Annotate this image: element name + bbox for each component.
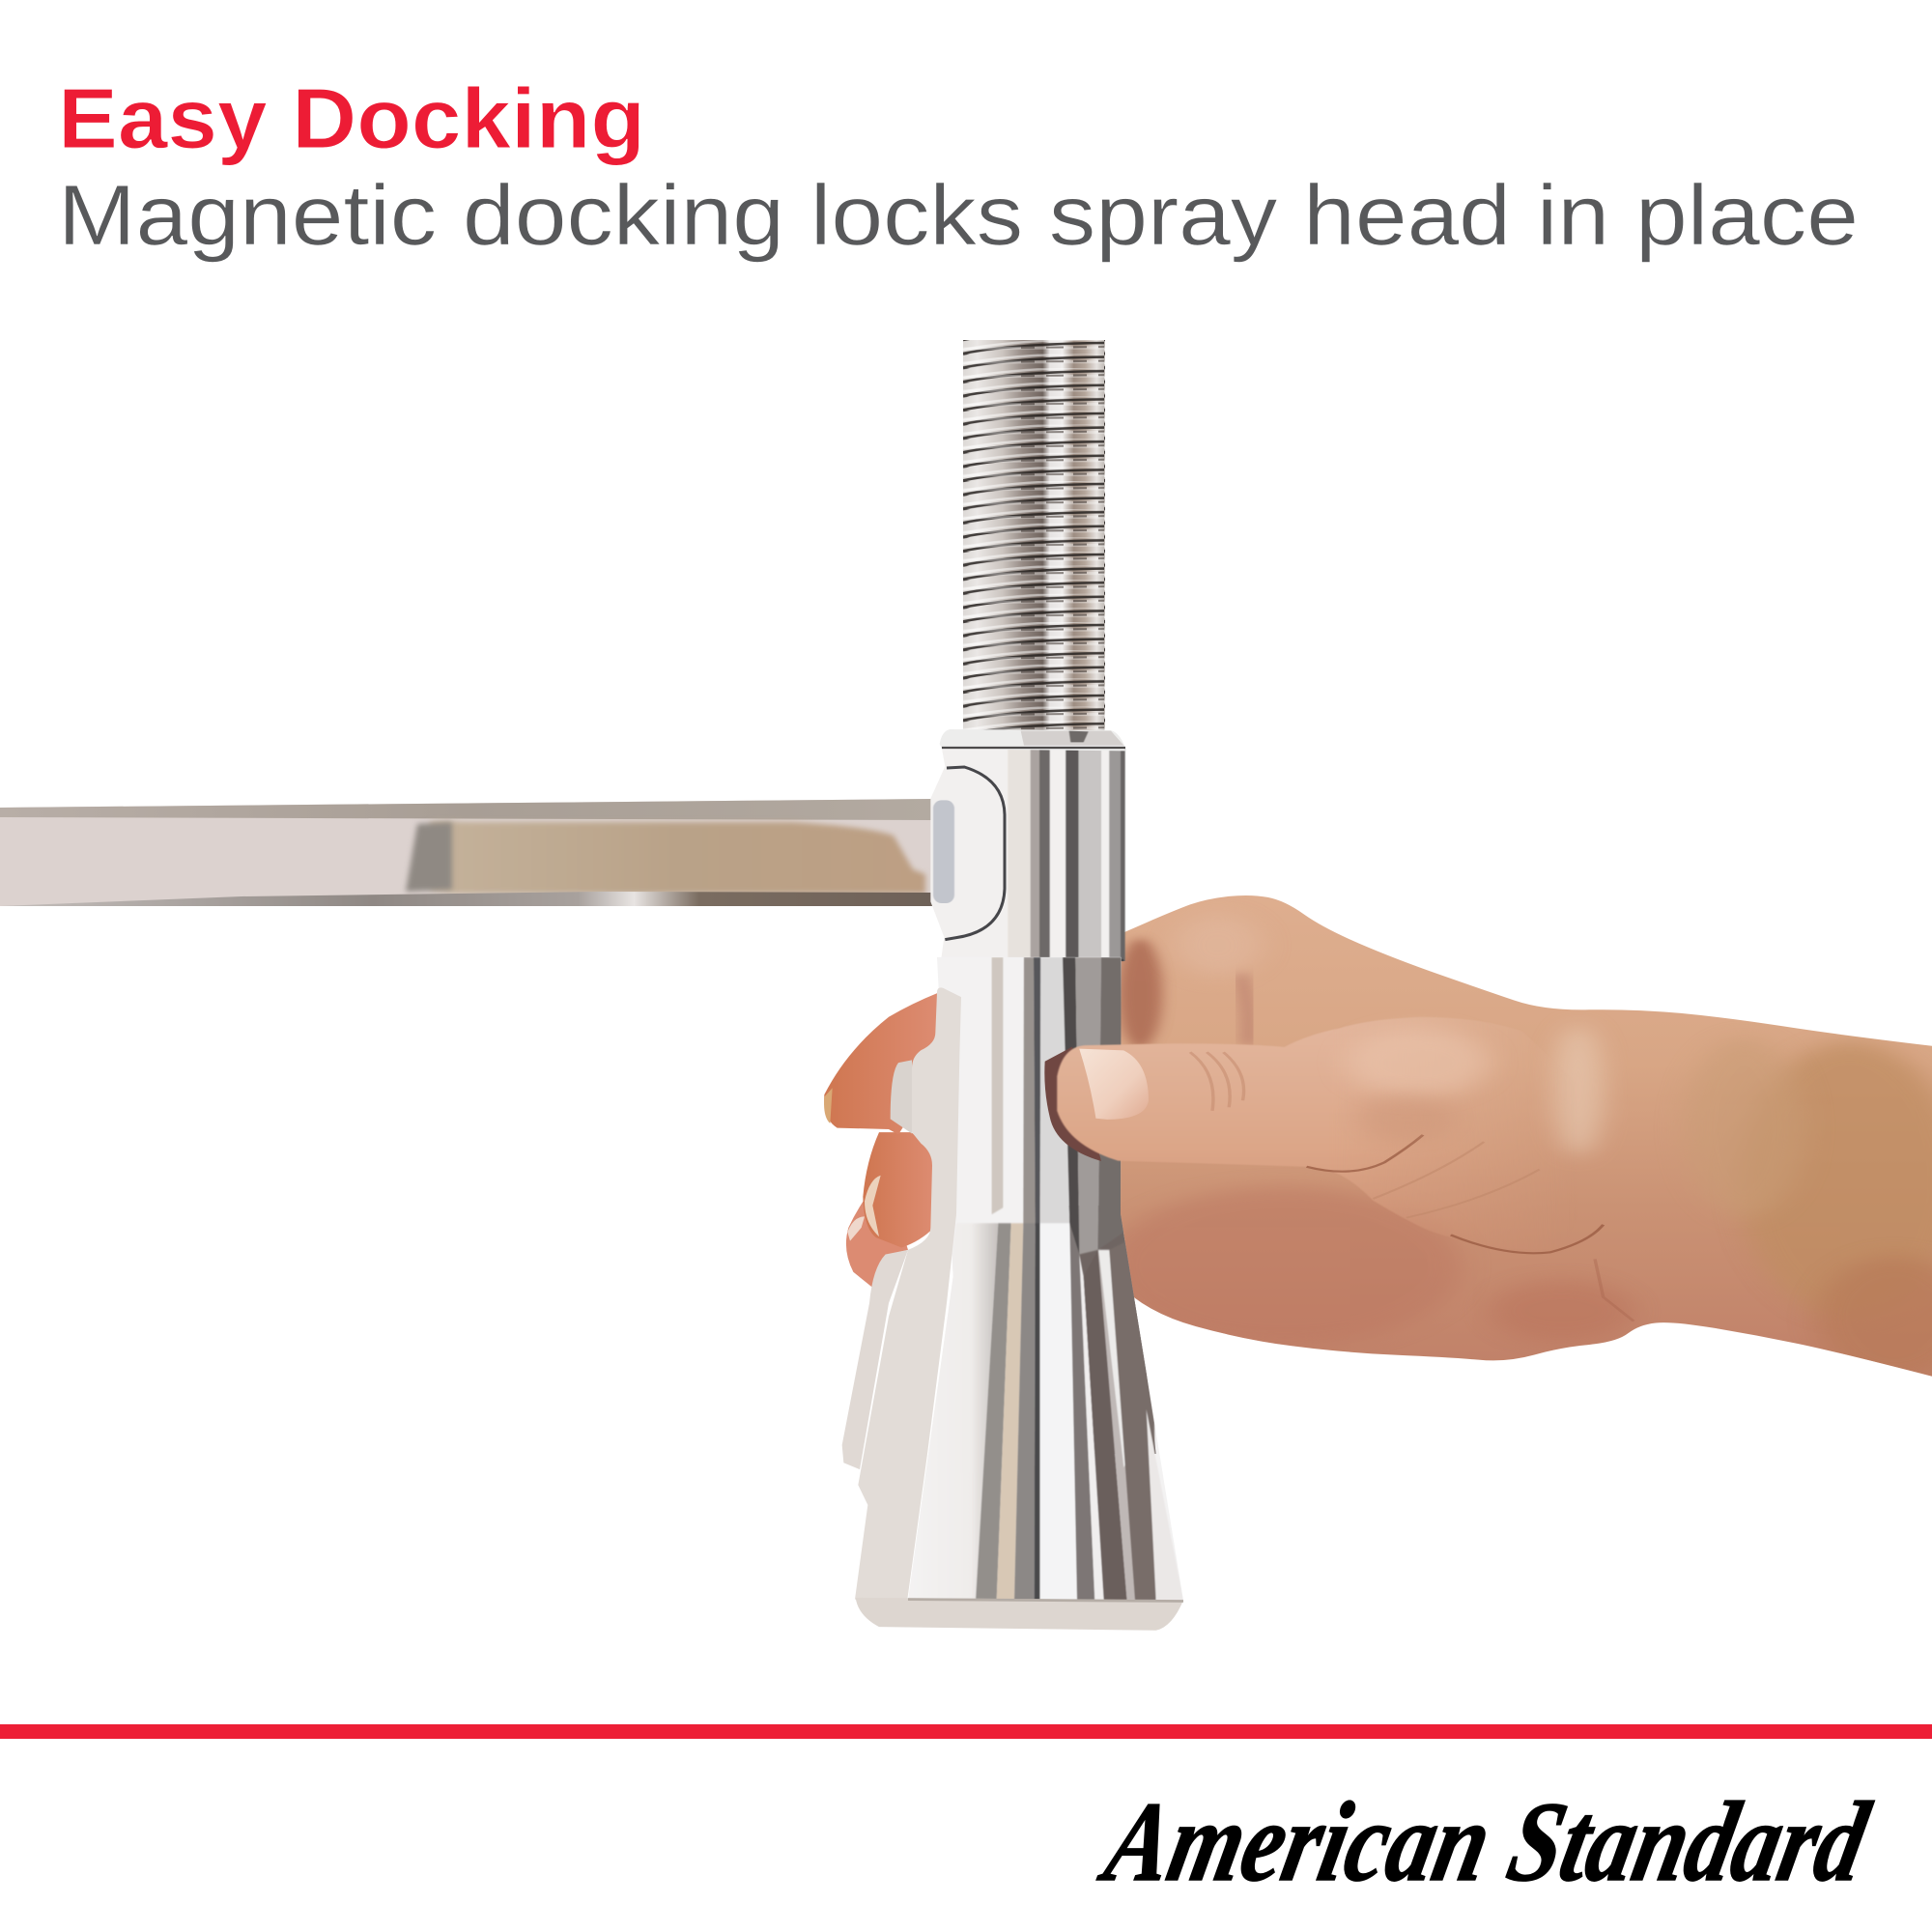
matte base xyxy=(856,1598,1183,1631)
ribbed hose xyxy=(963,340,1105,731)
reflection of thumb in chrome xyxy=(1044,1047,1101,1161)
magnetic dock outline xyxy=(945,767,1005,940)
fingernails xyxy=(865,1176,881,1236)
lower chrome flare xyxy=(908,957,1183,1601)
photo: faucet spray head held by a hand xyxy=(0,340,1932,1631)
index finger xyxy=(824,993,940,1134)
palm and forearm xyxy=(1121,895,1932,1377)
ring finger xyxy=(846,1188,908,1288)
thumb xyxy=(1056,1017,1482,1233)
red divider xyxy=(0,1724,1932,1739)
title: Easy Docking xyxy=(58,71,645,166)
lower paddle button xyxy=(842,1250,908,1469)
handle side xyxy=(855,987,961,1600)
subtitle: Magnetic docking locks spray head in place xyxy=(58,167,1859,263)
matte handle and buttons xyxy=(842,987,961,1600)
collar xyxy=(940,729,1125,751)
top button xyxy=(891,1060,912,1134)
thumb creases xyxy=(1307,1135,1604,1253)
upper chrome cylinder xyxy=(930,729,1125,961)
thumbnail xyxy=(1079,1049,1149,1120)
horizontal faucet arm xyxy=(0,799,932,906)
chrome spray head body xyxy=(842,729,1183,1631)
thumb knuckle wrinkles xyxy=(1190,1052,1244,1111)
thumb in front of the spray head xyxy=(1044,1017,1604,1253)
middle finger xyxy=(863,1132,935,1248)
left fingers behind the handle xyxy=(824,993,940,1288)
